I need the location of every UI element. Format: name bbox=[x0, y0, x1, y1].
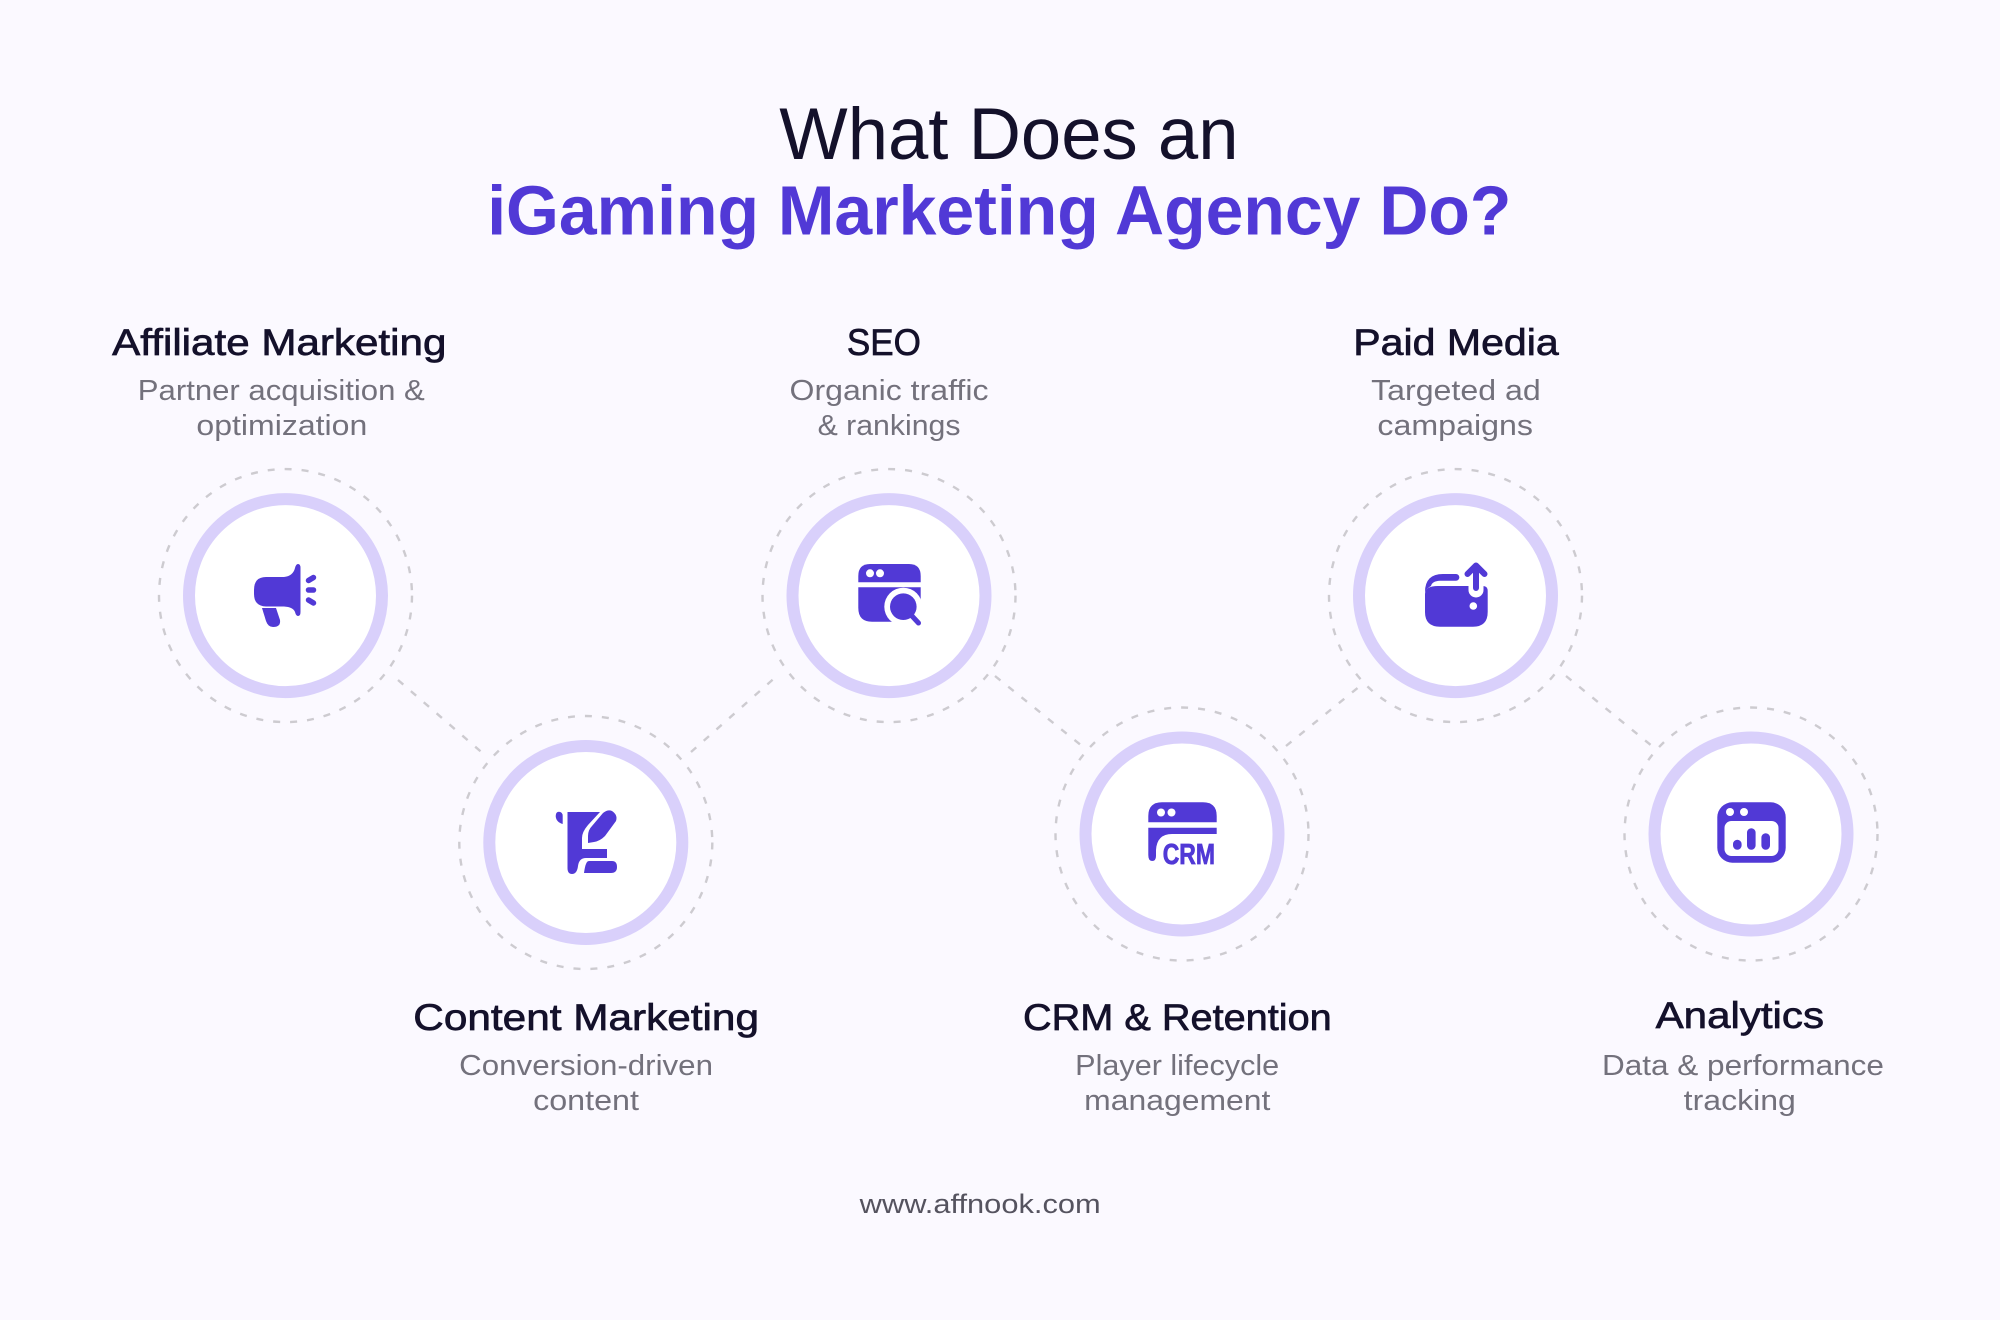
icon: browser with CRM bbox=[1148, 802, 1217, 871]
ring bbox=[189, 499, 382, 692]
description: content bbox=[533, 1085, 639, 1117]
description bbox=[1371, 375, 1541, 442]
icon: browser with CRM: CRM bbox=[1163, 839, 1215, 871]
description: & rankings bbox=[818, 410, 960, 442]
description: Partner acquisition & bbox=[138, 375, 425, 407]
description: campaigns bbox=[1377, 410, 1533, 442]
dashed outer circle bbox=[459, 716, 712, 969]
icon: dashboard window bbox=[1717, 802, 1786, 863]
ring bbox=[489, 746, 682, 939]
connector: SEO to CRM bbox=[995, 676, 1082, 746]
description: optimization bbox=[196, 410, 367, 442]
connector: paid media to analytics bbox=[1566, 676, 1652, 746]
description bbox=[138, 375, 425, 442]
dashed outer circle bbox=[762, 469, 1016, 722]
ring bbox=[1086, 738, 1278, 930]
icon: wallet with arrow bbox=[1425, 566, 1488, 627]
heading: Paid Media bbox=[1353, 322, 1559, 363]
dashed outer circle bbox=[1624, 708, 1878, 960]
description: management bbox=[1084, 1085, 1270, 1117]
title line 2: iGaming Marketing Agency Do? bbox=[487, 172, 1511, 250]
description bbox=[1075, 1050, 1279, 1117]
title line 1: What Does an bbox=[779, 94, 1238, 175]
heading: SEO bbox=[847, 322, 921, 363]
ring bbox=[1654, 738, 1848, 930]
heading: Affiliate Marketing bbox=[112, 322, 446, 363]
icon: megaphone bbox=[254, 564, 314, 627]
connector: CRM to paid media bbox=[1286, 682, 1365, 746]
heading: CRM & Retention bbox=[1023, 997, 1332, 1038]
panel: content marketing bbox=[413, 716, 759, 1117]
footer url: www.affnook.com bbox=[859, 1189, 1101, 1219]
description: Data & performance bbox=[1602, 1050, 1884, 1082]
ring bbox=[1359, 499, 1552, 692]
dashed outer circle bbox=[1329, 469, 1582, 722]
panel: affiliate marketing bbox=[112, 322, 446, 722]
description: Player lifecycle bbox=[1075, 1050, 1279, 1082]
description bbox=[790, 375, 988, 442]
connector: affiliate to content bbox=[398, 680, 482, 753]
description: Targeted ad bbox=[1371, 375, 1541, 407]
ring bbox=[792, 499, 986, 692]
icon: browser with magnifier bbox=[858, 564, 922, 626]
dashed outer circle bbox=[1056, 708, 1308, 960]
heading: Content Marketing bbox=[413, 997, 759, 1038]
dashed outer circle bbox=[159, 469, 412, 722]
panel: analytics bbox=[1602, 708, 1884, 1117]
panel: CRM and retention bbox=[1023, 708, 1332, 1117]
description bbox=[459, 1050, 713, 1117]
icon: scroll and pen bbox=[556, 810, 617, 874]
connector: content to SEO bbox=[691, 678, 774, 752]
panel: SEO bbox=[762, 322, 1016, 722]
description: Organic traffic bbox=[790, 375, 988, 407]
description bbox=[1602, 1050, 1884, 1117]
heading: Analytics bbox=[1656, 995, 1824, 1036]
title bbox=[487, 94, 1511, 250]
panel: paid media bbox=[1329, 322, 1582, 722]
description: Conversion-driven bbox=[459, 1050, 713, 1082]
description: tracking bbox=[1684, 1085, 1796, 1117]
